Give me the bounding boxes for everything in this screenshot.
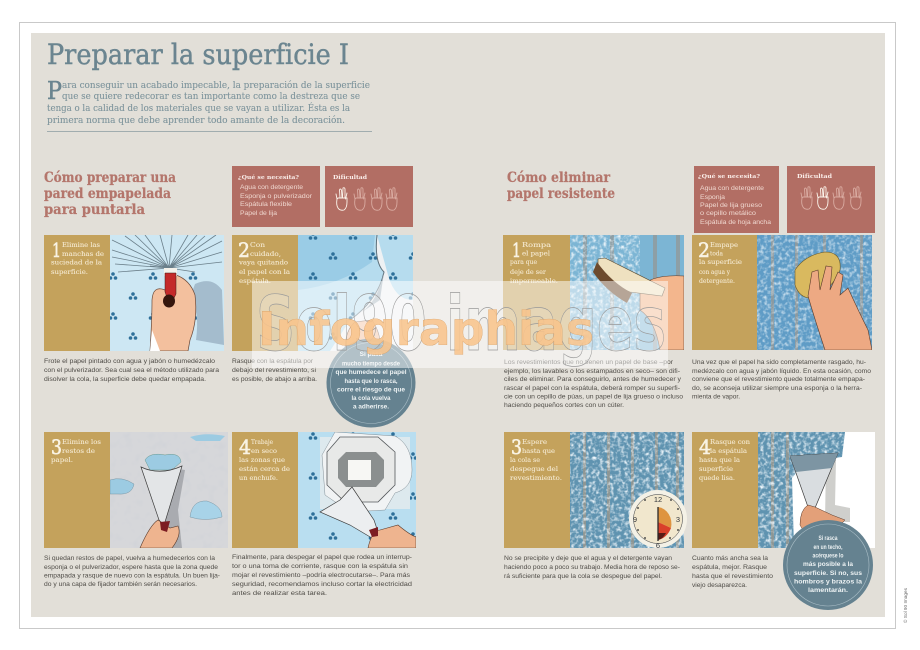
step 2 right: label: 2 <box>698 238 710 262</box>
step 2 left: label: espátula. <box>239 277 271 285</box>
intro paragraph: que se quiere redecorar es tan importante como la destreza que se <box>62 91 360 102</box>
heading: como preparar una pared: pared empapelada <box>44 186 171 202</box>
step 4 left: label: están cerca de <box>239 465 290 473</box>
body text step 2 left: es posible, de abajo a arriba. <box>232 376 317 383</box>
illustration: hand spraying wallpaper <box>110 235 224 351</box>
step 1 left: label <box>44 235 110 351</box>
body text step 2 right: medézcalo con agua y jabón líquido. En esta ocasión, como <box>692 368 871 375</box>
step 2 left: label: 2 <box>238 238 250 262</box>
step 2 left: label: el papel con la <box>239 268 290 276</box>
body text step 1 right: ciles de eliminar. Para conseguirlo, antes de humedecer y <box>504 376 682 383</box>
step 2 right: label: detergente. <box>699 277 735 285</box>
step 2 left: label: vaya quitando <box>238 258 288 266</box>
step 3 right: label <box>504 432 570 548</box>
body text step 1 right: rascar el papel con la espátula, deberá romper su superfi- <box>504 385 680 392</box>
step 1 right: label: para que <box>510 258 537 266</box>
illustration: scraping a ceiling <box>758 432 875 548</box>
step 1 left: label: suciedad de la <box>51 258 102 266</box>
body text step 4 right <box>692 555 773 589</box>
callout circle: right <box>783 520 873 610</box>
body text step 2 left: Rasque con la espátula por <box>232 358 314 365</box>
step 3 right: label: 3 <box>511 435 522 459</box>
box: que se necesita, right: Papel de lija grueso <box>700 202 763 209</box>
step 1 left: label: manchas de <box>62 250 104 258</box>
step 4 right: label: Rasque con <box>710 438 750 446</box>
step 2 left: label: cuidado, <box>250 250 281 258</box>
step 3 right: label: hasta que <box>522 447 555 455</box>
body text step 4 left: mojar el revestimiento –podría electrocutarse–. Para más <box>232 572 410 579</box>
box: dificultad, left: Dificultad <box>333 175 367 181</box>
step 2 right: label: Empape <box>710 241 738 249</box>
body text step 1 left <box>44 358 219 383</box>
icon: clock <box>629 490 687 550</box>
step 3 right: label: revestimiento. <box>510 474 562 482</box>
illustration: peeling wallpaper <box>298 235 413 351</box>
intro paragraph: tenga o la calidad de los materiales que se vayan a utilizar. Ésta es la <box>47 102 350 114</box>
heading: como eliminar papel: papel resistente <box>507 186 615 202</box>
step 3 left: label: Elimine los <box>62 438 101 446</box>
illustration: hand with sponge <box>757 235 872 350</box>
step 2 right: label <box>692 235 757 350</box>
callout circle: right: más posible a la <box>803 561 853 568</box>
box: que se necesita, right: Agua con detergente <box>700 185 765 192</box>
box: que se necesita, left <box>232 166 320 227</box>
body text step 2 left: debajo del revestimiento, si <box>232 367 316 374</box>
step 1 right: label: impermeable. <box>510 277 558 285</box>
box: que se necesita, left: Espátula flexible <box>240 201 293 208</box>
illustration: wall socket <box>298 432 416 548</box>
body text step 1 left: Frote el papel pintado con agua y jabón o humedézcalo <box>44 358 215 365</box>
step 1 right: label: el papel <box>522 250 550 258</box>
heading: como preparar una pared: Cómo preparar una <box>44 170 176 186</box>
box: que se necesita, left: Esponja o pulverizador <box>240 193 312 200</box>
callout circle: left: Si pasa <box>360 351 383 358</box>
box: que se necesita, left: ¿Qué se necesita? <box>238 174 300 181</box>
step 3 left: label: papel. <box>51 456 73 464</box>
body text step 2 right: mienta de vapor. <box>692 394 740 400</box>
callout circle: left: corre el riesgo de que <box>337 386 405 394</box>
step 2 left: label <box>232 235 298 351</box>
step 4 right: label: quede lisa. <box>699 474 735 482</box>
box: dificultad, right: Dificultad <box>797 174 832 180</box>
body text step 2 right <box>692 359 871 400</box>
body text step 3 left: esponja o el pulverizador, espere hasta que la zona quede <box>44 564 218 571</box>
heading: como preparar una pared: para puntarla <box>44 202 145 218</box>
body text step 4 left: seguridad, recomendamos incluso cortar la electricidad <box>232 581 413 588</box>
callout circle: right: lamentarán. <box>808 587 848 594</box>
step 1 left: label: 1 <box>52 238 61 262</box>
illustration: wire brush on paper <box>570 235 684 350</box>
body text step 3 left: do y una capa de fijador también serán necesarios. <box>44 581 197 588</box>
step 1 right: label: 1 <box>512 238 521 262</box>
step 3 right: label: la cola se <box>510 456 540 464</box>
step 2 right: label: toda <box>710 250 723 258</box>
callout circle: left: mucho tiempo desde <box>342 360 400 368</box>
icon: clock: 12 <box>654 495 662 504</box>
box: que se necesita, left: Agua con detergente <box>240 184 304 191</box>
step 4 left: label <box>232 432 298 548</box>
body text step 2 right: conviene que el revestimiento quede totalmente empapa- <box>692 376 865 383</box>
step 3 left: label: 3 <box>51 435 62 459</box>
body text step 1 right: haciendo pequeños cortes con un cúter. <box>504 402 624 409</box>
step 4 right: label: hasta que la <box>699 456 740 464</box>
body text step 4 left: Finalmente, para despegar el papel que rodea un interrup- <box>232 554 412 561</box>
step 4 left: label: las zonas que <box>239 456 285 464</box>
step 2 right: label: la superficie <box>699 258 742 266</box>
box: que se necesita, right: Espátula de hoja ancha <box>700 219 772 226</box>
body text step 4 left <box>232 554 413 597</box>
heading: como eliminar papel: Cómo eliminar <box>507 170 611 186</box>
box: que se necesita, right: ¿Qué se necesita? <box>698 173 761 180</box>
callout circle: right: superficie. Si no, sus <box>794 570 862 577</box>
body text step 4 right: espátula, mejor. Rasque <box>692 564 767 571</box>
icon: clock: 9 <box>633 515 637 524</box>
callout circle: right: Si rasca <box>818 535 838 542</box>
icon: clock: 3 <box>676 515 680 524</box>
icon: clock: 6 <box>656 541 660 550</box>
step 4 right: label <box>692 432 758 548</box>
intro paragraph: P <box>47 77 62 105</box>
body text step 1 left: con el pulverizador. Sea cual sea el método utilizado para <box>44 367 219 374</box>
step 1 left: label: Elimine las <box>62 241 100 249</box>
box: que se necesita, right: o cepillo metálico <box>700 210 757 217</box>
callout circle: left: a adherirse. <box>353 404 389 410</box>
step 2 left: label: Con <box>250 241 265 249</box>
callout circle: left: la cola vuelva <box>352 395 391 402</box>
body text step 4 right: Cuanto más ancha sea la <box>692 555 768 562</box>
body text step 3 left: Si quedan restos de papel, vuelva a humedecerlos con la <box>44 555 215 562</box>
body text step 1 right: cie con un cepillo de púas, un papel de lija grueso o incluso <box>504 394 683 400</box>
intro paragraph: primera norma que debe aprender todo amante de la decoración. <box>47 115 345 126</box>
step 1 right: label <box>503 235 570 350</box>
step 4 right: label: la espátula <box>710 447 747 455</box>
box: que se necesita, right <box>694 166 779 233</box>
step 4 left: label: un enchufe. <box>239 474 278 482</box>
step 4 left: label: Trabaje <box>251 438 273 446</box>
step 1 right: label: deje de ser <box>510 268 547 276</box>
box: que se necesita, right: Esponja <box>700 194 726 201</box>
step 3 left: label: restos de <box>62 447 95 455</box>
heading: como eliminar papel <box>507 170 615 202</box>
box: dificultad, right <box>787 166 875 233</box>
body text step 3 left <box>44 555 220 588</box>
callout circle: right: en un techo, <box>814 544 843 551</box>
body text step 1 left: disolver la cola, la superficie debe quedar empapada. <box>44 376 206 383</box>
intro paragraph <box>47 77 370 126</box>
step 4 right: label: superficie <box>699 465 733 473</box>
callout circle: right: hombros y brazos la <box>794 578 862 586</box>
credit: © Sol 90 Images <box>902 587 908 623</box>
body text step 3 left: empapada y rasque de nuevo con la espátula. Un buen lija- <box>44 572 220 580</box>
illustration: scraping paper remains <box>110 432 228 548</box>
callout circle: left <box>326 338 416 428</box>
body text step 3 right: No se precipite y deje que el agua y el detergente vayan <box>504 555 672 562</box>
body text step 4 right: viejo desaparezca. <box>692 582 747 589</box>
body text step 1 right <box>504 359 683 409</box>
callout circle: left: hasta que lo rasca, <box>344 378 398 385</box>
step 4 left: label: 4 <box>239 435 251 459</box>
body text step 1 right: ejemplo, los lavables o los estampados en seco– son difi- <box>504 368 680 375</box>
step 4 left: label: en seco <box>251 447 277 455</box>
step 1 left: label: superficie. <box>51 268 88 276</box>
watermark: Infographias <box>258 302 594 356</box>
watermark: Sol90 images <box>256 279 666 368</box>
box: que se necesita, left: Papel de lija <box>240 210 278 217</box>
step 1 right: label: Rompa <box>522 241 551 249</box>
body text step 1 right: Los revestimientos que no tienen un papel de base –por <box>504 359 674 366</box>
body text step 4 right: hasta que el revestimiento <box>692 573 773 580</box>
box: dificultad, left <box>325 166 413 227</box>
step 3 right: label: Espere <box>522 438 547 446</box>
body text step 4 left: antes de realizar esta tarea. <box>232 590 327 597</box>
body text step 2 right: Una vez que el papel ha sido completamente rasgado, hu- <box>692 359 866 366</box>
step 2 right: label: con agua y <box>699 268 730 276</box>
step 4 right: label: 4 <box>699 435 711 459</box>
body text step 3 right: haciendo poco a poco su trabajo. Media hora de reposo se- <box>504 564 680 571</box>
callout circle: right: acérquese lo <box>812 552 844 560</box>
heading: como preparar una pared <box>44 170 176 218</box>
body text step 3 right: rá suficiente para que la cola se despegue del papel. <box>504 573 662 580</box>
body text step 2 left <box>232 358 317 383</box>
step 3 left: label <box>44 432 110 548</box>
body text step 4 left: tor o una toma de corriente, rasque con la espátula sin <box>232 563 408 570</box>
callout circle: left: que humedece el papel <box>336 369 407 376</box>
step 3 right: label: despegue del <box>510 465 558 473</box>
illustration: wall with clock <box>570 432 684 548</box>
body text step 3 right <box>504 555 680 580</box>
body text step 2 right: do, se aconseja utilizar siempre una esponja o la herra- <box>692 385 862 392</box>
intro paragraph: ara conseguir un acabado impecable, la preparación de la superficie <box>62 80 370 91</box>
title: Preparar la superficie I <box>47 38 349 71</box>
